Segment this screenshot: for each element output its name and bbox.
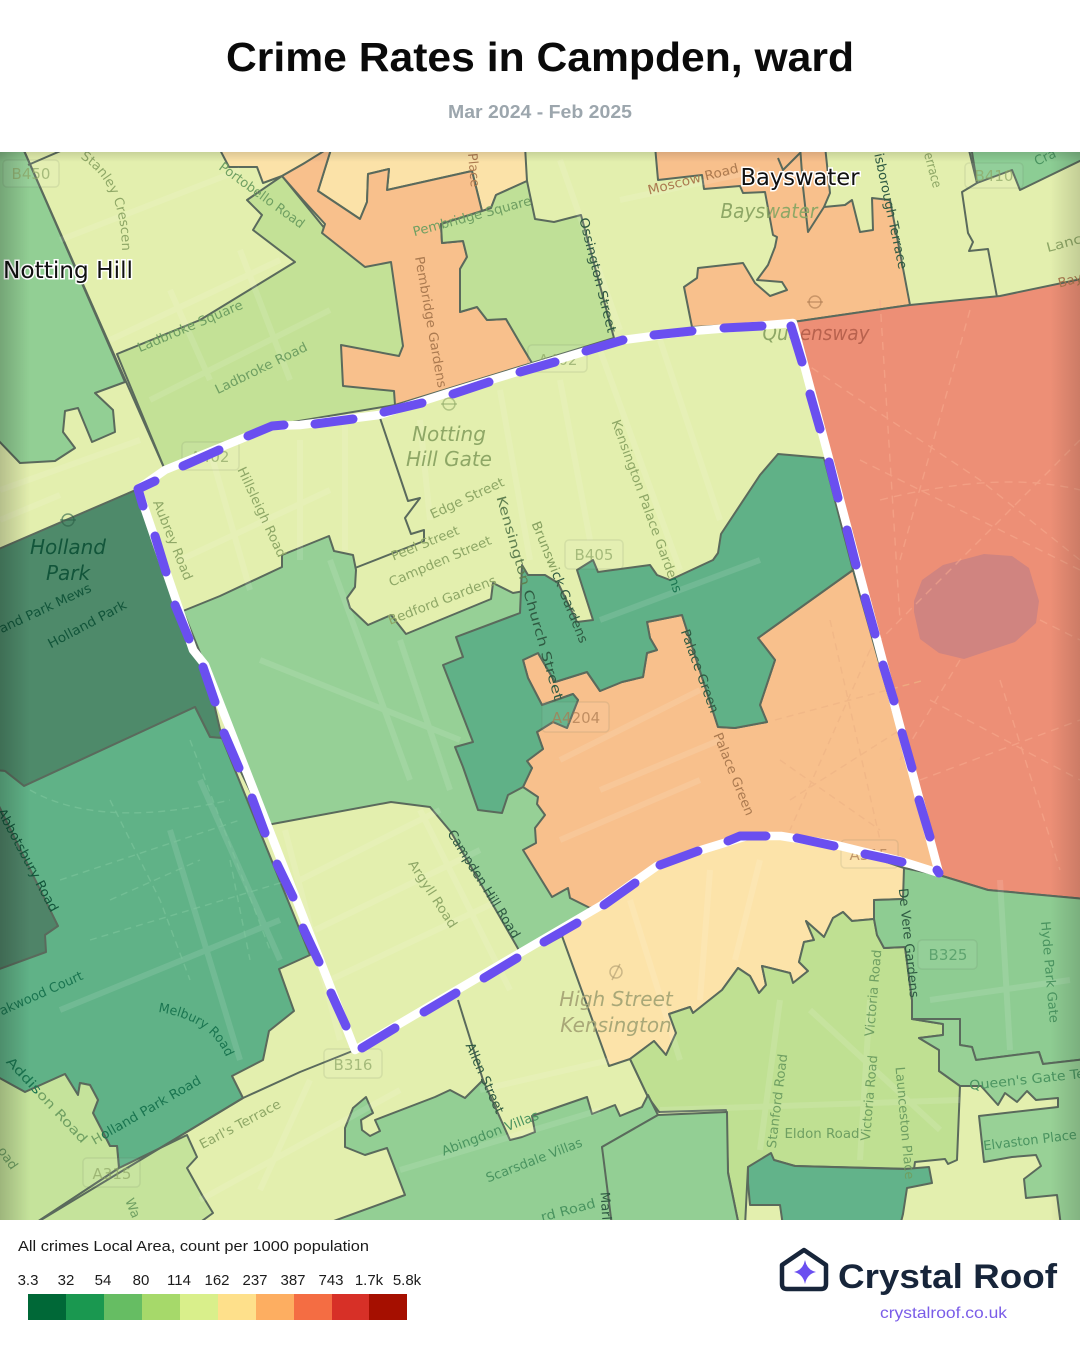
legend scale values: 54 (95, 1272, 111, 1289)
zone: Pembridge Square green (441, 181, 614, 363)
street: Hyde Park Gate: Hyde Park Gate (1037, 921, 1061, 1024)
street: Launceston Place: Launceston Place (892, 1066, 916, 1180)
street: Stanford Road: Stanford Road (765, 1053, 791, 1149)
road shield: B405 (565, 540, 623, 569)
street texture (0, 160, 1070, 1200)
road shield: A315 north: A315 (850, 846, 888, 864)
place: High Street Kensington: Kensington (560, 1013, 672, 1037)
zone: Holland teal (0, 707, 310, 1168)
street: Pembridge Square: Pembridge Square (411, 194, 533, 240)
zone: De Vere green (874, 868, 1080, 1064)
street: Kensington Church Street: Kensington Church Street (493, 494, 565, 702)
road shield: A402 east: A402 (539, 351, 577, 369)
road shield: B450 (3, 160, 59, 187)
road shield: A402 east (528, 345, 587, 372)
street: Hillsleigh Road: Hillsleigh Road (234, 465, 289, 560)
road shield: B410: B410 (975, 167, 1013, 185)
zone: north-west mid green (0, 146, 125, 463)
Kensington Gardens footpaths (775, 620, 925, 840)
street: Victoria Road north: Victoria Road (863, 949, 885, 1037)
street: Cra: Cra (1032, 147, 1059, 169)
zone: south teal (748, 1153, 932, 1226)
legend scale values: 80 (133, 1272, 149, 1289)
road shield: A402 west (182, 442, 239, 470)
zone: Ladbroke light green (117, 176, 420, 470)
street: Peel Street: Peel Street (389, 524, 462, 564)
street: Scarsdale Villas: Scarsdale Villas (484, 1136, 585, 1186)
street: Eldon Road: Eldon Road (784, 1127, 860, 1142)
street: Marloes fragment: Marl (596, 1192, 613, 1221)
street: Palace Green south: Palace Green (710, 731, 756, 818)
street: Moscow Road: Moscow Road (646, 161, 740, 199)
legend scale values: 162 (204, 1272, 230, 1289)
zone: Abbotsbury dark green (0, 796, 58, 971)
legend scale values: 237 (242, 1272, 268, 1289)
street: Queen's Gate Terrace: Queen's Gate Ter (969, 1066, 1080, 1094)
street: Victoria Road south: Victoria Road (859, 1055, 881, 1142)
street: Allen Street: Allen Street (462, 1041, 506, 1116)
place: Bayswater big label: Bayswater (740, 165, 860, 191)
road shield: A4204 (542, 702, 609, 732)
zone: Pembridge light orange (319, 152, 528, 218)
Holland Park footpaths (30, 740, 290, 980)
street: Ladbroke Road: Ladbroke Road (213, 340, 310, 398)
title: Crime Rates in Campden, ward (226, 34, 854, 80)
road shield: A402 west: A402 (191, 448, 229, 466)
street: Ladbroke Square: Ladbroke Square (135, 298, 245, 356)
logo wordmark: Crystal Roof (838, 1258, 1058, 1296)
street: De Vere Gardens: De Vere Gardens (895, 888, 921, 999)
icon: Notting Hill Gate station (441, 398, 457, 410)
ward boundary: white casing (138, 323, 939, 1050)
street: Pembridge Gardens: Pembridge Gardens (411, 255, 449, 389)
street: Portobello Road: Portobello Road (216, 160, 307, 232)
icon: house outline with star (782, 1250, 826, 1289)
legend scale values: 5.8k (393, 1272, 422, 1289)
road shield: B405: B405 (575, 546, 613, 564)
legend scale values (18, 1272, 422, 1289)
zone: Holland Park dark green (0, 489, 222, 786)
choropleth map (0, 152, 1080, 1220)
place: Bayswater district: Bayswater (720, 199, 819, 223)
street: Addison Road: Addison Road (3, 1055, 90, 1147)
street: Warwick fragment: Wa (121, 1196, 143, 1220)
street: Campden Hill Road: Campden Hill Road (444, 828, 523, 942)
road shield: B316 (324, 1049, 382, 1078)
street: Place: Place (464, 153, 482, 188)
road shield: A315 south (83, 1158, 140, 1187)
tube station icons (60, 296, 823, 980)
road shield: B325 (918, 940, 977, 969)
icon: High Street Kensington station (610, 964, 622, 980)
logo: Crystal Roof (782, 1250, 1058, 1322)
legend scale values: 3.3 (18, 1272, 38, 1289)
zone: Kensington south light green (630, 912, 960, 1226)
street: Ossington Street: Ossington Street (575, 216, 619, 334)
street: Holland Park: Holland Park (46, 598, 130, 652)
street: errace: errace (920, 151, 944, 190)
street: Gloucester Terrace fragment: isborough Terrace (870, 152, 910, 270)
legend colour ramp (28, 1294, 407, 1320)
street: Palace Green north: Palace Green (677, 627, 721, 715)
street: Brunswick Gardens: Brunswick Gardens (528, 519, 590, 646)
legend scale values: 32 (58, 1272, 74, 1289)
road shield: B450: B450 (12, 165, 50, 183)
legend scale values: 1.7k (355, 1272, 384, 1289)
zone: The Serpentine lake (914, 554, 1039, 659)
street: Aubrey Road: Aubrey Road (149, 498, 195, 583)
street: Edge Street: Edge Street (428, 475, 507, 523)
ward boundary: purple dashes (138, 326, 939, 1048)
place: High Street Kensington: High Street (559, 987, 674, 1011)
subtitle: date range: Mar 2024 - Feb 2025 (448, 102, 632, 122)
zone: Hyde Park salmon (793, 278, 1080, 899)
zone: central teal (443, 454, 853, 813)
place: Notting Hill Gate: Hill Gate (406, 447, 492, 471)
legend scale values: 743 (318, 1272, 344, 1289)
road shield: A315 south: A315 (93, 1165, 131, 1183)
zone: Bayswater orange (655, 146, 910, 327)
zone: Pembridge orange (282, 146, 532, 405)
zone: Kensington Gardens and Phillimore orange (523, 570, 939, 908)
place: Holland Park: Holland (30, 535, 106, 559)
place: Holland Park: Park (46, 561, 91, 585)
street: Earl's Terrace: Earl's Terrace (197, 1097, 284, 1153)
place: Notting Hill big label: Notting Hill (3, 258, 133, 284)
boundary lines (22, 146, 997, 1226)
place: Notting Hill Gate: Notting (412, 422, 486, 446)
legend scale values: 387 (280, 1272, 306, 1289)
street: Bedford Gardens: Bedford Gardens (386, 573, 499, 629)
street: Melbury Road: Melbury Road (159, 1002, 235, 1056)
street: Elvaston Place: Elvaston Place (983, 1128, 1078, 1154)
street: Holland Park Road: Holland Park Road (89, 1073, 204, 1148)
zone: Addison light green (0, 1074, 119, 1226)
place: Queensway: Queensway (762, 321, 871, 345)
street: Kensington Palace Gardens: Kensington Palace Garde ns (608, 418, 684, 595)
zone: High Street light orange (562, 835, 904, 1066)
street: Argyll Road: Argyll Road (405, 858, 460, 931)
zones (0, 146, 1080, 1226)
legend scale values: 114 (167, 1272, 191, 1289)
street: Abingdon Villas: Abingdon Villas (440, 1108, 541, 1159)
logo url: crystalroof.co.uk (880, 1305, 1008, 1322)
road shield: B410 (965, 163, 1023, 188)
street: Campden Street: Campden Street (387, 534, 494, 590)
zone: Queen's Gate mid green (912, 1019, 1080, 1226)
street: Road fragment south: rd Road (539, 1197, 597, 1226)
legend (18, 1238, 422, 1320)
icon: Holland Park station (60, 514, 76, 526)
place labels (3, 165, 871, 1037)
zone: top-right green (968, 152, 1080, 191)
icon: Queensway station (807, 296, 823, 308)
zone: Warwick light green (31, 1135, 213, 1226)
road shield: B325: B325 (929, 946, 967, 964)
zone: Campden mid green (183, 536, 600, 952)
road shield: B316: B316 (334, 1056, 372, 1074)
zone: Portobello light orange (220, 152, 320, 184)
map base: lightest zone (0, 152, 1080, 1220)
road shield: A4204: A4204 (552, 709, 600, 727)
legend title: All crimes Local Area, count per 1000 population (18, 1238, 369, 1255)
map edge vignette (0, 152, 1080, 1220)
zone: Abingdon mid green (320, 1080, 658, 1226)
park footpaths (800, 300, 1080, 870)
zone: Marloes mid green (602, 1112, 739, 1226)
street: Lanc: Lanc (1045, 232, 1080, 256)
road shield: A315 north (841, 840, 898, 868)
